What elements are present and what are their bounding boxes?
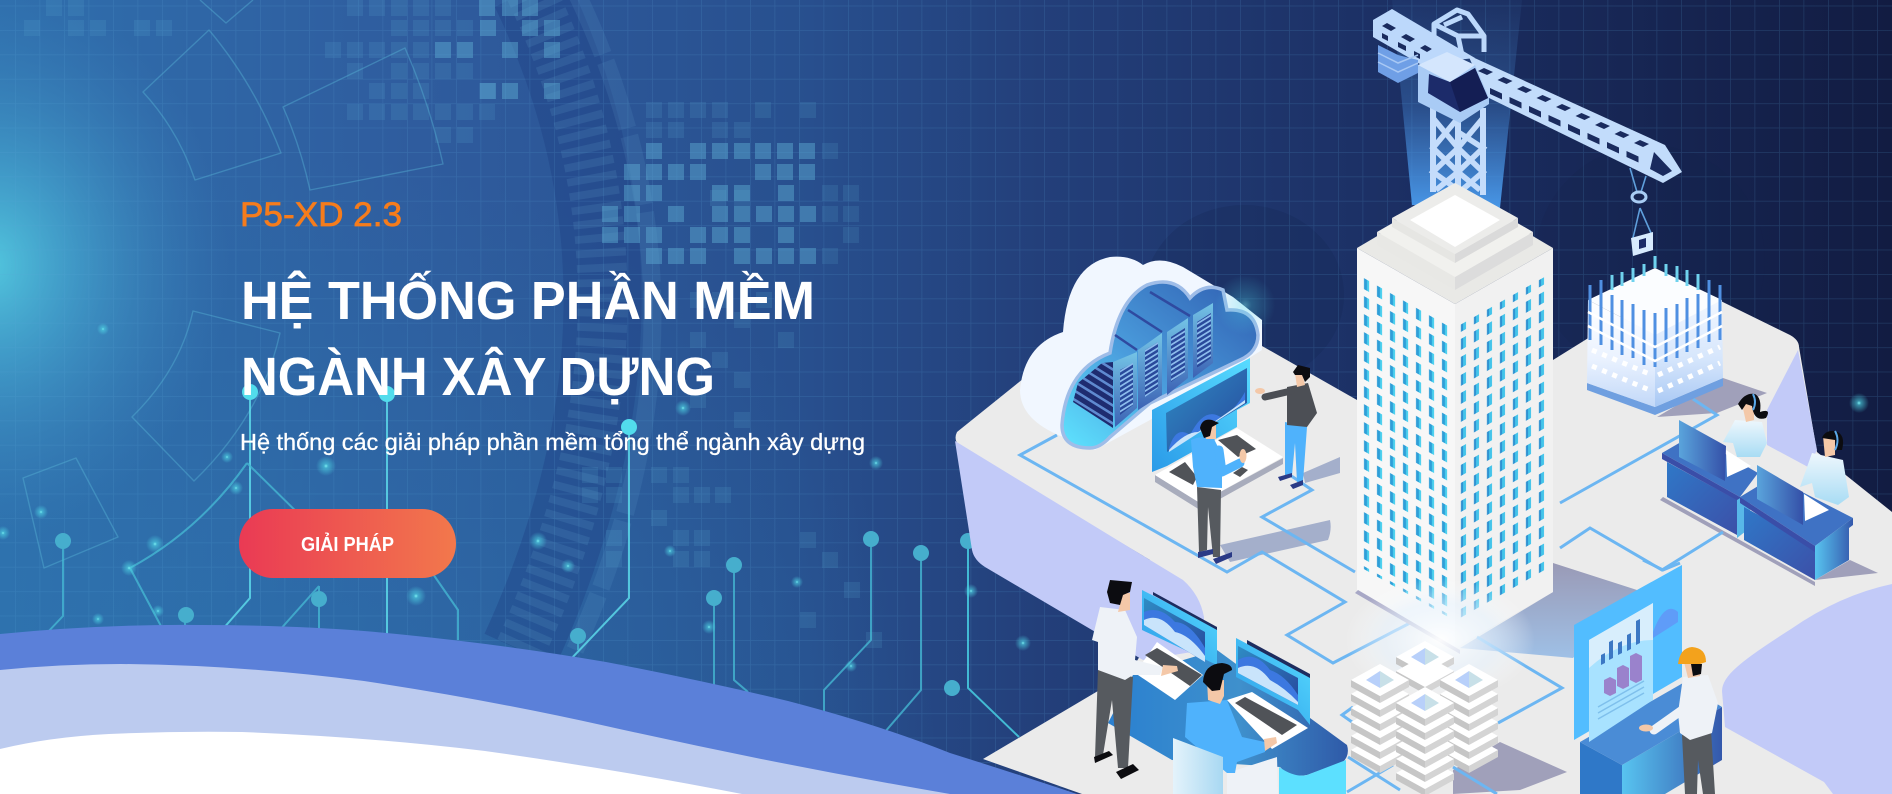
panel: isometric platform floor xyxy=(956,280,1892,794)
panel: construction engineer console xyxy=(1574,565,1722,794)
main heading: NGÀNH XÂY DỰNG xyxy=(241,346,715,407)
glow beside cloud xyxy=(1215,275,1275,335)
a-frame xyxy=(1434,10,1484,55)
operator cab xyxy=(1418,52,1489,123)
counterweight xyxy=(1378,45,1418,83)
keyboard paper two xyxy=(1804,494,1829,521)
glow sparks xyxy=(0,323,1869,672)
decorative wave footer xyxy=(0,625,1077,794)
circuit nodes xyxy=(55,384,976,696)
crane mast xyxy=(1433,108,1483,195)
laptop two xyxy=(1227,692,1308,749)
platform side wall: lower right xyxy=(1722,584,1892,794)
subtitle: Hệ thống các giải pháp phần mềm tổng thể ngành xây dựng xyxy=(240,429,865,455)
monitor one xyxy=(1679,420,1726,481)
version label: P5-XD 2.3 xyxy=(240,196,402,234)
person: man in grey sweater xyxy=(1255,365,1317,489)
icon: large laptop and dashboard xyxy=(1152,358,1283,510)
rear jib xyxy=(1373,9,1475,64)
button: solutions: GIẢI PHÁP xyxy=(301,533,394,556)
hoist cable and hook xyxy=(1630,168,1651,238)
hanging load block xyxy=(1631,232,1653,256)
crane light beam xyxy=(1392,0,1522,208)
desk two xyxy=(1740,477,1853,580)
person: standing man in white shirt xyxy=(1092,580,1178,779)
main jib xyxy=(1468,55,1682,183)
cube window rows xyxy=(1592,347,1720,391)
purple bar cubes xyxy=(1604,653,1642,696)
stepped roof xyxy=(1357,183,1553,304)
icon: server stack xyxy=(1351,641,1498,794)
button: solutions xyxy=(239,509,456,578)
monitor two xyxy=(1236,638,1310,725)
gear ring band xyxy=(520,0,652,650)
panel: double workstation desk xyxy=(1108,590,1348,794)
desk one xyxy=(1662,435,1758,538)
panel: reception desks xyxy=(1662,394,1853,580)
person: left call agent xyxy=(1723,394,1768,457)
platform side wall: left xyxy=(955,441,1204,660)
icon: central skyscraper xyxy=(1355,183,1553,654)
floor circuit traces xyxy=(1020,399,1723,794)
monitor two xyxy=(1757,465,1803,525)
server racks xyxy=(1073,292,1213,428)
orange hard hat xyxy=(1678,647,1706,664)
floor shadows xyxy=(1220,378,1878,794)
keyboard paper one xyxy=(1726,450,1751,477)
rebar columns xyxy=(1590,256,1720,367)
icon: tower crane xyxy=(1373,9,1682,256)
monitor one xyxy=(1142,590,1217,665)
person: seated man in blue shirt with chair xyxy=(1173,663,1278,794)
circuit lines xyxy=(46,392,1019,740)
tower faces xyxy=(1357,248,1455,648)
person: man in blue shirt at dashboard xyxy=(1191,420,1246,564)
laptop one xyxy=(1135,642,1203,700)
icon: cloud data center xyxy=(1020,257,1275,450)
pixel squares xyxy=(24,8,882,640)
large holographic screen xyxy=(1574,565,1682,742)
main heading: HỆ THỐNG PHẦN MỀM xyxy=(241,270,815,331)
person: right call agent xyxy=(1800,431,1849,505)
curved outline shapes xyxy=(23,0,443,568)
cube floor beams xyxy=(1588,312,1722,361)
cloud body xyxy=(1020,257,1262,450)
icon: building under construction xyxy=(1587,256,1723,415)
base glow xyxy=(1345,578,1535,702)
person: engineer with orange helmet xyxy=(1639,647,1718,794)
office chair xyxy=(1173,738,1223,794)
platform side wedge: upper right xyxy=(1767,350,1817,467)
main heading xyxy=(241,270,815,407)
cloud opening xyxy=(1062,282,1258,448)
